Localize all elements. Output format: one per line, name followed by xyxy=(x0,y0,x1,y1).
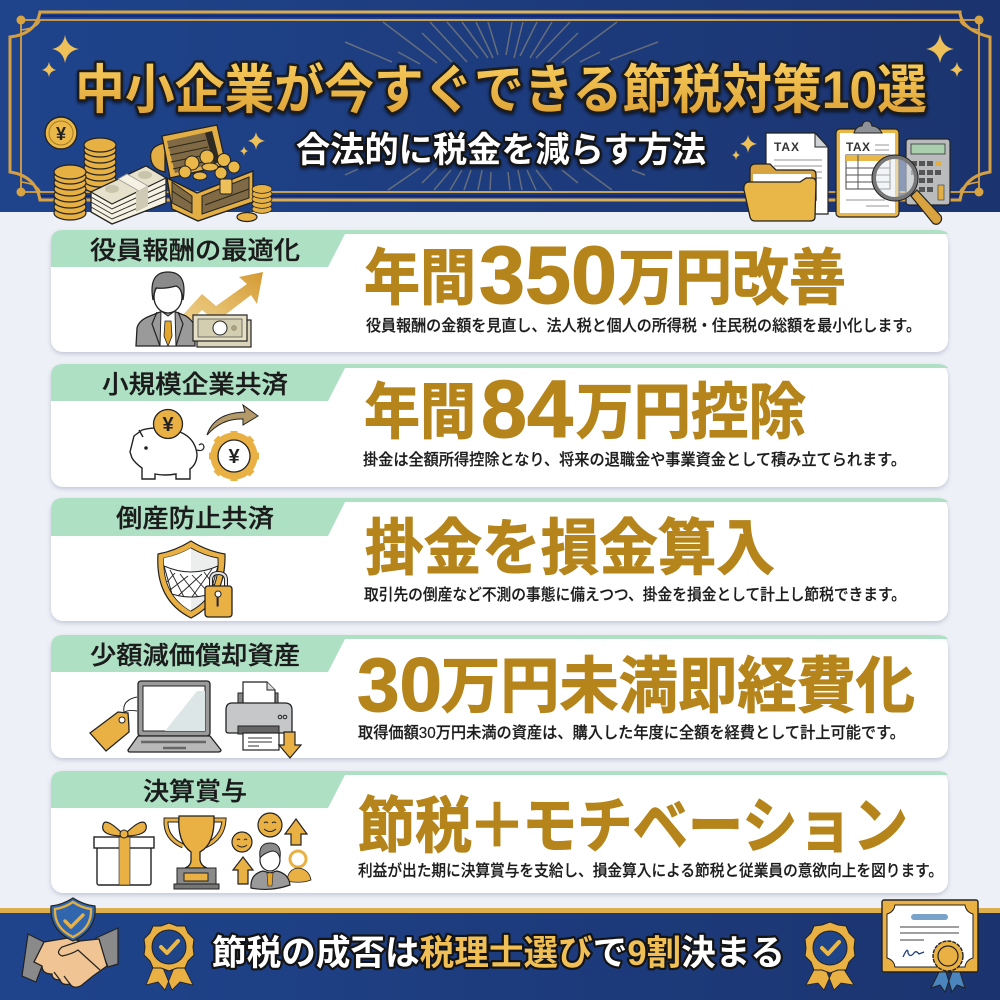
card 5 label: 決算賞与 xyxy=(143,778,247,806)
card 2 icon: piggy bank and gear: ¥ xyxy=(162,414,174,436)
card 4 icon: printer with down arrow xyxy=(226,682,301,758)
card 2 icon: piggy bank and gear: ¥ xyxy=(228,446,240,468)
card 4 icon: price tag xyxy=(90,697,137,751)
icon: folder xyxy=(744,164,816,221)
card 4 headline: 万円未満即経費化 xyxy=(441,652,915,720)
card 5 headline xyxy=(358,792,908,860)
card 3 headline: 掛金を損金算入 xyxy=(365,514,775,582)
card 3 description: 取引先の倒産など不測の事態に備えつつ、掛金を損金として計上し節税できます。 xyxy=(364,585,906,604)
icon: left award badge xyxy=(144,923,194,990)
card 5 icon: gift box xyxy=(94,822,154,885)
card 2 headline: 84 xyxy=(481,364,573,455)
subtitle: 合法的に税金を減らす方法 xyxy=(296,131,706,170)
icon: clipboard: TAX xyxy=(846,140,870,154)
card 5: 決算賞与 xyxy=(51,771,948,893)
card 1 headline xyxy=(364,230,846,321)
icon: tax document xyxy=(766,133,828,214)
icon: calculator xyxy=(906,139,950,205)
card 5 panel xyxy=(51,771,948,893)
card 2 headline: 万円控除 xyxy=(576,378,806,446)
icon: magnifying glass xyxy=(872,155,942,224)
card 1 headline: 年間 xyxy=(364,244,476,312)
card 3 panel xyxy=(51,498,948,621)
card 5 headline: ＋ xyxy=(468,792,526,860)
card 4 icon: laptop xyxy=(128,681,221,752)
decorative gold frame xyxy=(10,12,990,200)
icon: certificate with ribbon xyxy=(882,900,978,992)
card 2 headline: 年間 xyxy=(364,378,476,446)
card 2 headline xyxy=(364,364,806,455)
icon: right award badge xyxy=(805,922,855,990)
card 5 headline: 節税 xyxy=(358,792,472,860)
card 4 description: 取得価額30万円未満の資産は、購入した年度に全額を経費として計上可能です。 xyxy=(358,724,905,742)
card 3: 倒産防止共済 xyxy=(51,498,948,621)
icon: stack of banknotes xyxy=(91,166,166,224)
footer banner xyxy=(0,898,1000,1000)
card 1 label: 役員報酬の最適化 xyxy=(90,237,300,265)
sparkles xyxy=(42,34,963,160)
card 3 label: 倒産防止共済 xyxy=(116,505,274,533)
card 4 label: 少額減価償却資産 xyxy=(90,642,300,670)
title: 中小企業が今すぐできる節税対策10選 xyxy=(75,61,927,120)
card 2: 小規模企業共済 xyxy=(51,364,948,487)
card 4 headline: 30 xyxy=(357,643,442,728)
card 5 description: 利益が出た期に決算賞与を支給し、損金算入による節税と従業員の意欲向上を図ります。 xyxy=(358,861,943,880)
card 2 label: 小規模企業共済 xyxy=(102,371,288,399)
card 2 icon: piggy bank and gear xyxy=(130,405,259,481)
card 1 description: 役員報酬の金額を見直し、法人税と個人の所得税・住民税の総額を最小化します。 xyxy=(366,317,921,335)
decorative dark lines inside frame xyxy=(40,16,960,196)
card 5 headline: モチベーション xyxy=(522,792,908,860)
icon: tax document: TAX xyxy=(774,140,799,154)
card 5 icon: trophy xyxy=(166,816,224,889)
icon: treasure chest xyxy=(151,125,253,221)
icon: small coin stack xyxy=(237,185,272,222)
card 2 description: 掛金は全額所得控除となり、将来の退職金や事業資金として積み立てられます。 xyxy=(363,451,906,469)
icon: coin stacks xyxy=(45,117,116,220)
icon: coin stacks: ¥ xyxy=(56,124,66,144)
icon: clipboard xyxy=(836,121,899,217)
header banner xyxy=(0,0,1000,224)
card 4 headline xyxy=(357,643,915,728)
card 1 panel xyxy=(51,230,948,352)
card 1 headline: 万円改善 xyxy=(618,244,846,312)
card 1 headline: 350 xyxy=(479,230,617,321)
card 4 panel xyxy=(51,635,948,758)
card 2 panel xyxy=(51,364,948,487)
card 3 icon: shield with net and padlock xyxy=(158,541,232,618)
card 4: 少額減価償却資産 xyxy=(51,635,948,758)
card 5 icon: smiling staff and rising arrows xyxy=(232,813,311,889)
icon: handshake with shield xyxy=(22,898,118,987)
decorative rays xyxy=(345,22,658,190)
card 1 icon: businessman with rising arrow and cash xyxy=(136,272,263,347)
footer message: 節税の成否は税理士選びで9割決まる xyxy=(212,934,785,973)
card 1: 役員報酬の最適化 xyxy=(51,230,948,352)
